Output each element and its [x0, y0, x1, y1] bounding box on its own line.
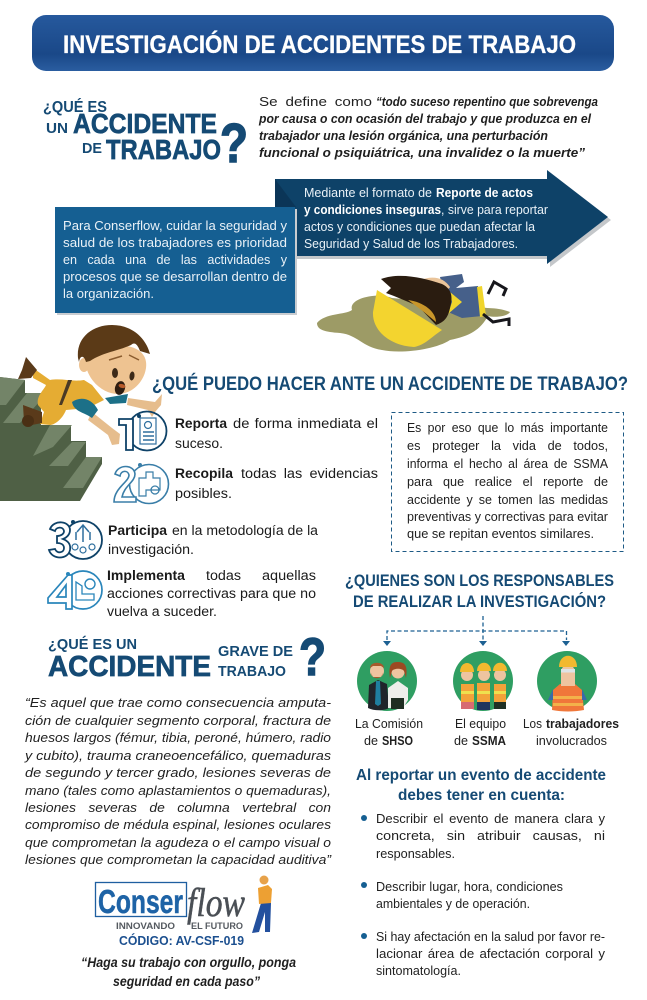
- callout: dashed box: [392, 412, 624, 552]
- icon: step 2: [114, 463, 168, 504]
- heading: qué es un accidente de trabajo: [43, 97, 248, 174]
- text: step 1: [175, 416, 378, 451]
- text: step 1: Reporta: [175, 416, 227, 431]
- logo: conserflow: [96, 876, 272, 948]
- definition text: [258, 95, 598, 160]
- quote: definición accidente grave: lesiones que comprometan la capacidad auditiva”: [25, 852, 332, 867]
- arrow callout: reporte de actos: [275, 170, 611, 267]
- callout: dashed box: accidente y se tomen las medidas: [407, 493, 608, 507]
- illustration: injured worker on the ground: [317, 274, 510, 352]
- arrow callout: reporte de actos: y condiciones inseguras: [304, 202, 441, 217]
- heading: al reportar: [356, 767, 606, 804]
- quote: definición accidente grave: de segundo y tercer grado, lesiones severas de: [25, 765, 331, 780]
- quote: slogan: seguridad en cada paso”: [113, 973, 260, 989]
- heading: accidente grave: TRABAJO: [218, 663, 286, 680]
- bullet list: responsables.: [376, 847, 455, 861]
- labels: responsables: SSMA: [472, 734, 506, 748]
- heading: qué es un accidente de trabajo: DE: [82, 140, 102, 157]
- heading: accidente grave: GRAVE DE: [218, 643, 293, 660]
- definition text: “todo suceso repentino que sobrevenga: [376, 95, 598, 109]
- text: step 1: de forma inmediata el: [233, 416, 378, 431]
- heading: qué es un accidente de trabajo: TRABAJO: [106, 134, 221, 165]
- logo: conserflow: Conser: [98, 883, 183, 920]
- icon: comisión SHSO: [357, 651, 417, 711]
- text: step 3: [108, 523, 319, 557]
- labels: responsables: de: [364, 734, 378, 748]
- heading: accidente grave: ACCIDENTE: [48, 651, 211, 683]
- heading: al reportar: debes tener en cuenta:: [398, 787, 565, 804]
- panel: para conserflow: salud de los trabajadores es prioridad: [63, 235, 287, 250]
- labels: responsables: El equipo: [455, 717, 506, 731]
- quote: definición accidente grave: “Es aquel que trae como consecuencia amputa-: [25, 695, 332, 710]
- dashed connector arrows: [383, 616, 570, 646]
- quote: definición accidente grave: lesiones severas de columna vertebral con: [25, 800, 331, 815]
- heading: responsables: DE REALIZAR LA INVESTIGACIÓN?: [353, 592, 606, 611]
- icon: equipo SSMA: [453, 651, 513, 711]
- bullet list: Si hay afectación en la salud por favor re-: [376, 930, 605, 944]
- definition text: trabajador una lesión orgánica, una perturbación: [259, 129, 548, 143]
- heading: responsables: ¿QUIENES SON LOS RESPONSABLES: [345, 572, 614, 590]
- text: step 3: Participa: [108, 523, 168, 538]
- bullet list: concreta, sin atribuir causas, ni: [376, 829, 605, 843]
- quote: definición accidente grave: compromiso de médula espinal, lesiones oculares: [25, 817, 332, 832]
- quote: slogan: “Haga su trabajo con orgullo, ponga: [81, 954, 296, 970]
- quote: definición accidente grave: que comprometan la agudeza o el campo visual o: [25, 835, 331, 850]
- heading: al reportar: Al reportar un evento de accidente: [356, 767, 606, 784]
- quote: definición accidente grave: [24, 695, 332, 867]
- quote: definición accidente grave: huesos largos (fémur, tibia, peroné, húmero, radio: [25, 730, 331, 745]
- text: step 2: Recopila: [175, 466, 233, 481]
- callout: dashed box: informa el hecho al área de SSMA: [407, 457, 609, 471]
- bullet list: sintomatología.: [376, 964, 461, 978]
- heading: accidente grave: ¿QUÉ ES UN: [48, 636, 137, 653]
- definition text: por causa o con ocasión del trabajo y que produzca en el: [258, 112, 592, 126]
- heading: accidente grave: ?: [299, 628, 326, 687]
- quote: definición accidente grave: mano (tales como aplastamientos o quemaduras),: [25, 783, 331, 798]
- labels: responsables: [355, 717, 619, 748]
- callout: dashed box: que se repitan eventos similares.: [407, 527, 594, 541]
- title banner: INVESTIGACIÓN DE ACCIDENTES DE TRABAJO: [63, 29, 576, 59]
- quote: definición accidente grave: y cubito), trauma craneoencefálico, quemaduras: [24, 748, 332, 763]
- callout: dashed box: para que realice el reporte de: [407, 475, 608, 489]
- title banner: [32, 15, 614, 71]
- text: step 4: acciones correctivas para que no: [107, 586, 316, 601]
- icon: step 4: [48, 571, 102, 609]
- bullet list: [361, 812, 606, 978]
- panel: para conserflow: Para Conserflow, cuidar la seguridad y: [63, 218, 288, 233]
- panel: para conserflow: procesos que se desarrollan dentro de: [63, 269, 287, 284]
- heading: qué es un accidente de trabajo: UN: [46, 120, 68, 137]
- bullet list: lacionar área de afectación corporal y: [376, 947, 606, 961]
- heading: qué es un accidente de trabajo: ACCIDENTE: [73, 108, 217, 139]
- arrow callout: reporte de actos: , sirve para reportar: [441, 202, 549, 217]
- text: step 4: vuelva a suceder.: [107, 604, 217, 619]
- labels: responsables: Los: [523, 717, 542, 731]
- bullet list: ambientales y de operación.: [376, 897, 530, 911]
- heading: responsables: [345, 572, 614, 611]
- heading: qué es un accidente de trabajo: ?: [220, 112, 248, 174]
- callout: dashed box: Es por eso que lo más importante: [407, 421, 608, 435]
- labels: responsables: de: [454, 734, 468, 748]
- quote: slogan: [81, 954, 296, 989]
- illustration: boy falling: [18, 325, 162, 445]
- logo: conserflow: flow: [187, 880, 245, 925]
- labels: responsables: SHSO: [382, 734, 413, 748]
- callout: dashed box: preventivas y correctivas para evitar: [407, 510, 608, 524]
- logo: conserflow: CÓDIGO: AV-CSF-019: [119, 933, 244, 948]
- bullet list: Describir el evento de manera clara y: [376, 812, 606, 826]
- callout: dashed box: es proteger la vida de todos,: [407, 439, 608, 453]
- text: step 2: posibles.: [175, 486, 232, 501]
- arrow callout: reporte de actos: Mediante el formato de: [304, 185, 432, 200]
- logo: conserflow: EL FUTURO: [191, 921, 243, 932]
- bullet list: Describir lugar, hora, condiciones: [376, 880, 563, 894]
- text: step 4: Implementa: [107, 568, 186, 583]
- text: step 2: [175, 466, 378, 501]
- text: step 3: en la metodología de la: [172, 523, 319, 538]
- definition text: funcional o psiquiátrica, una invalidez o la muerte”: [259, 146, 586, 160]
- text: step 1: suceso.: [175, 436, 223, 451]
- text: step 2: todas las evidencias: [241, 466, 378, 481]
- icon: step 1: [119, 412, 166, 450]
- labels: responsables: La Comisión: [355, 717, 423, 731]
- panel: para conserflow: en cada una de las actividades y: [63, 252, 288, 267]
- labels: responsables: trabajadores: [546, 717, 619, 731]
- quote: definición accidente grave: ción de cualquier segmento corporal, fractura de: [25, 713, 331, 728]
- icon: step 3: [49, 520, 102, 559]
- illustration: stairs: [0, 377, 102, 501]
- heading: accidente grave: [48, 628, 326, 687]
- text: step 3: investigación.: [108, 542, 194, 557]
- text: step 4: todas: [206, 568, 241, 583]
- panel: para conserflow: [55, 207, 297, 315]
- arrow callout: reporte de actos: actos y condiciones que puedan afectar la: [304, 219, 536, 234]
- labels: responsables: involucrados: [536, 734, 607, 748]
- text: step 4: [107, 568, 316, 619]
- arrow callout: reporte de actos: Reporte de actos: [436, 185, 533, 200]
- text: step 4: aquellas: [262, 568, 316, 583]
- icon: trabajadores: [537, 651, 597, 712]
- definition text: Se define como: [259, 95, 372, 109]
- arrow callout: reporte de actos: Seguridad y Salud de los Trabajadores.: [304, 236, 518, 251]
- panel: para conserflow: la organización.: [63, 286, 154, 301]
- heading: qué es un accidente de trabajo: ¿QUÉ ES: [43, 97, 107, 116]
- logo: conserflow: INNOVANDO: [116, 921, 175, 932]
